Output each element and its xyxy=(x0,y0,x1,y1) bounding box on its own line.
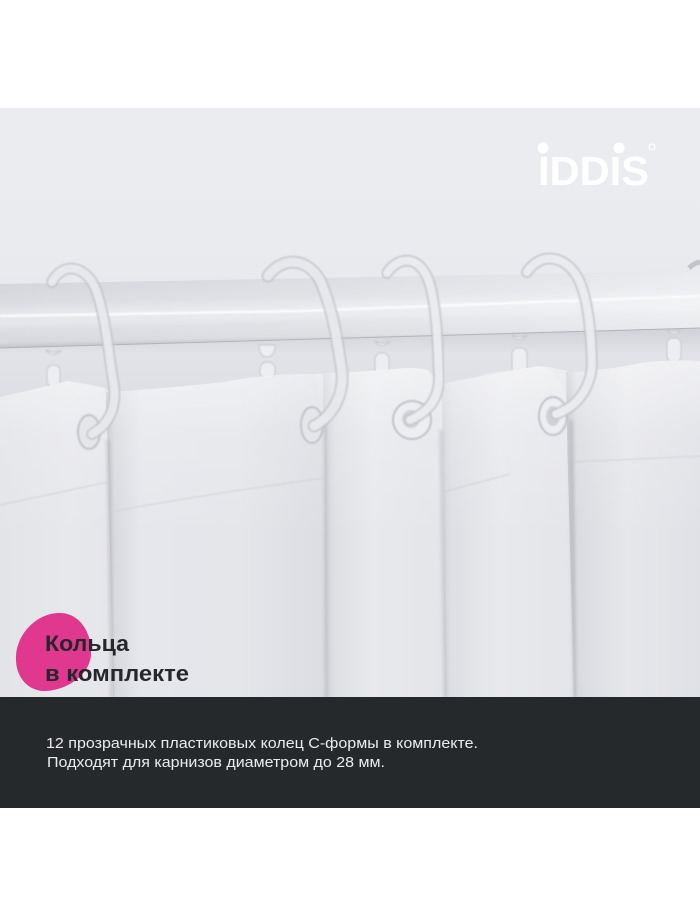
description text xyxy=(46,735,478,771)
ring 1 xyxy=(52,269,114,449)
curtain top highlight xyxy=(0,360,700,540)
logo dots xyxy=(538,142,624,154)
pink blob xyxy=(16,613,91,691)
ring 2 xyxy=(268,262,342,443)
wall background xyxy=(0,108,700,348)
curtain panel centre xyxy=(323,368,445,697)
registered mark xyxy=(649,144,655,150)
heading xyxy=(45,631,189,686)
ring 3 xyxy=(387,261,439,439)
ring 4 xyxy=(527,259,592,435)
rod brightening to the right xyxy=(0,271,700,348)
description line 2: Подходят для карнизов диаметром до 28 мм. xyxy=(47,754,385,771)
curtain panel left-centre xyxy=(106,374,326,697)
hooks under rod xyxy=(46,330,681,387)
shaded area under rod xyxy=(0,326,700,420)
photo: curtain on rod xyxy=(0,108,700,697)
rod lower edge xyxy=(0,328,700,348)
curtain panel left xyxy=(0,381,113,697)
curtain panel centre-right xyxy=(438,366,574,697)
description line 1: 12 прозрачных пластиковых колец С-формы в комплекте. xyxy=(46,735,478,752)
heading line 1: Кольца xyxy=(45,631,130,656)
curtain base layer xyxy=(0,410,700,697)
ring 5 partial xyxy=(689,262,700,268)
rod shine xyxy=(0,296,700,316)
logo wordmark: IDDIS xyxy=(538,148,649,194)
curtain panel right xyxy=(566,360,700,697)
logo: iDDiS xyxy=(538,142,655,194)
dark text band xyxy=(0,697,700,808)
curtain fold shadows xyxy=(108,420,575,697)
heading line 2: в комплекте xyxy=(45,661,189,686)
curtain seam line xyxy=(0,456,700,512)
curtain rod xyxy=(0,271,700,348)
